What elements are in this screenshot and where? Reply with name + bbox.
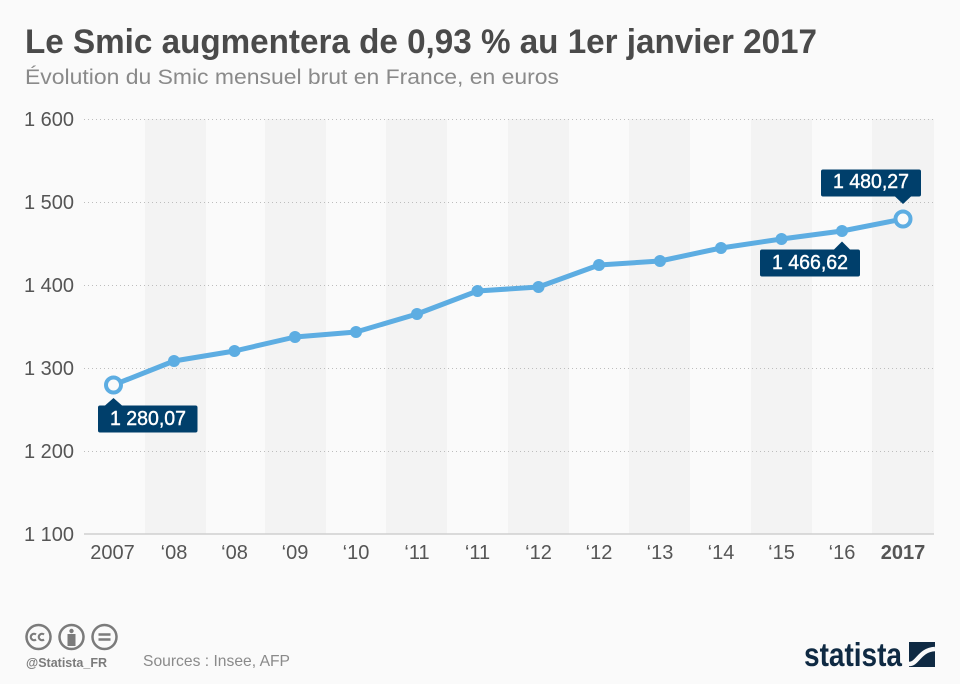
icon: cc [26,625,50,649]
x axis labels: ‘11 [404,542,430,564]
icon: no derivatives [92,625,116,649]
x axis labels: ‘08 [161,542,187,564]
icon: attribution [60,625,84,649]
source: Sources : Insee, AFP [143,653,290,670]
subtitle: Évolution du Smic mensuel brut en France, en euros [25,66,559,89]
logo mark [909,642,935,667]
x axis labels: 2017 [881,542,925,564]
y axis labels: 1 500 [24,192,74,214]
x axis labels: ‘10 [343,542,369,564]
y axis labels [24,109,74,546]
x axis labels: 2007 [90,542,135,564]
x axis labels: ‘13 [647,542,673,564]
callout 1 280,07: 1 280,07 [110,408,186,430]
callout 1 480,27: 1 480,27 [833,171,909,193]
callout 1 466,62 [760,242,860,276]
line chart [24,109,934,564]
x axis labels: ‘14 [708,542,734,564]
x axis labels: ‘15 [768,542,795,564]
y axis labels: 1 400 [24,275,74,297]
x axis labels: ‘12 [586,542,612,564]
highlighted point 2007 [106,378,121,392]
x axis labels: ‘16 [829,542,855,564]
social handle: @Statista_FR [26,655,108,670]
x axis labels: ‘09 [282,542,308,564]
callout 1 280,07 [98,398,198,432]
title: Le Smic augmentera de 0,93 % au 1er janvier 2017 [25,23,817,61]
callout 1 480,27 [821,170,921,204]
alternating column bands [145,119,934,534]
y axis labels: 1 100 [24,524,74,546]
x axis labels [90,542,925,564]
statista logo [804,636,935,673]
x axis labels: ‘08 [221,542,248,564]
data line [114,219,903,385]
icon: creative commons licence [26,625,116,649]
x axis labels: ‘12 [525,542,552,564]
x axis labels: ‘11 [465,542,490,564]
y axis labels: 1 200 [24,441,74,463]
y axis labels: 1 300 [24,358,74,380]
data points [168,225,848,367]
y axis labels: 1 600 [24,109,74,131]
highlighted point 2017 [896,212,910,226]
callout 1 466,62: 1 466,62 [772,252,848,274]
logo wordmark: statista [804,636,903,673]
